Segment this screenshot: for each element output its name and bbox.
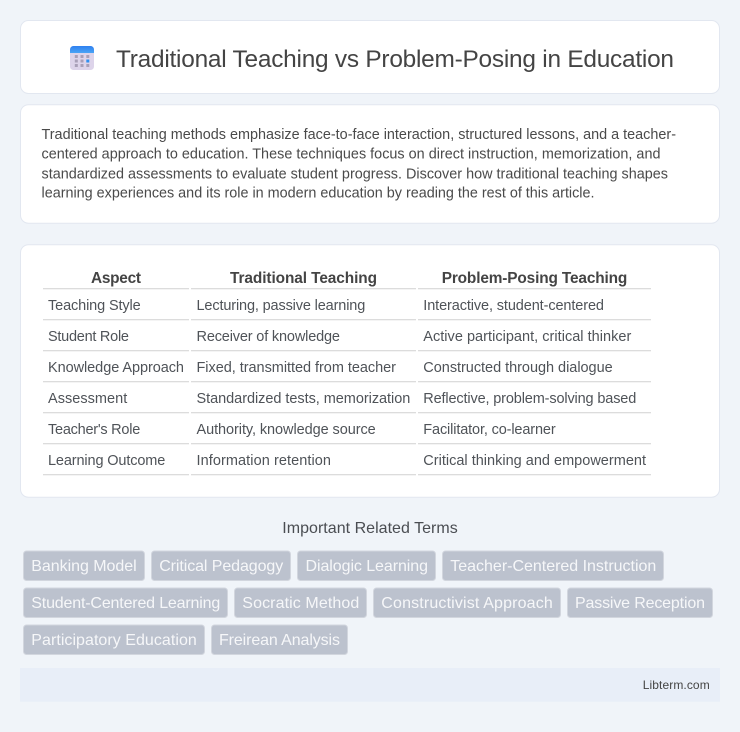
- tag: Student-Centered Learning: [24, 588, 228, 618]
- table header row: Traditional Teaching: [230, 270, 377, 287]
- panel: comparison table: [20, 245, 720, 497]
- table row: Student Role: Student Role: [48, 329, 129, 345]
- tag: Dialogic Learning: Dialogic Learning: [306, 558, 428, 575]
- table header row: Aspect: [91, 270, 141, 287]
- table row: Knowledge Approach: Fixed, transmitted from teacher: [196, 360, 396, 376]
- table row: Teaching Style: [43, 298, 651, 320]
- tag: Critical Pedagogy: [152, 551, 290, 580]
- table row: Assessment: Standardized tests, memorization: [196, 391, 410, 407]
- tag: Student-Centered Learning: Student-Centered Learning: [31, 595, 220, 612]
- tag: Banking Model: [24, 551, 144, 580]
- table row: Teacher's Role: [43, 422, 651, 444]
- intro paragraph: learning experiences and its role in modern education by reading the rest of this article.: [42, 185, 594, 201]
- table row: Teaching Style: Interactive, student-centered: [423, 298, 604, 314]
- tag: Teacher-Centered Instruction: Teacher-Centered Instruction: [450, 558, 656, 575]
- intro paragraph: Traditional teaching methods emphasize face-to-face interaction, structured lessons, and a teacher-: [42, 127, 676, 143]
- intro paragraph: standardized assessments to evaluate student progress. Discover how traditional teaching shapes: [42, 166, 668, 182]
- heading: related terms: Important Related Terms: [282, 520, 458, 537]
- table row: Student Role: Receiver of knowledge: [196, 329, 340, 345]
- table header row: Problem-Posing Teaching: [442, 270, 627, 287]
- table row: Learning Outcome: [43, 453, 651, 475]
- panel: header: [20, 20, 720, 94]
- tag: Participatory Education: [24, 625, 204, 654]
- intro paragraph: [42, 127, 676, 201]
- tag: Critical Pedagogy: Critical Pedagogy: [159, 558, 283, 575]
- tag: Passive Reception: [568, 588, 712, 618]
- table row: Knowledge Approach: Knowledge Approach: [48, 360, 184, 376]
- table row: Teacher's Role: Facilitator, co-learner: [423, 422, 556, 438]
- related term tags: [24, 551, 712, 654]
- tag: Freirean Analysis: Freirean Analysis: [219, 632, 340, 649]
- tag: Freirean Analysis: [212, 625, 348, 654]
- table row: Teaching Style: Lecturing, passive learning: [196, 298, 365, 314]
- table header row: [43, 270, 651, 289]
- table row: Knowledge Approach: [43, 360, 651, 382]
- table row: Teacher's Role: Teacher's Role: [48, 422, 140, 438]
- tag: Participatory Education: Participatory Education: [31, 632, 197, 649]
- tag: Constructivist Approach: [374, 588, 560, 618]
- table row: Assessment: Reflective, problem-solving based: [423, 391, 636, 407]
- table row: Knowledge Approach: Constructed through dialogue: [423, 360, 613, 376]
- table row: Teacher's Role: Authority, knowledge source: [196, 422, 376, 438]
- table row: Learning Outcome: Learning Outcome: [48, 453, 165, 469]
- title: Traditional Teaching vs Problem-Posing in Education: [116, 46, 674, 73]
- table row: Student Role: Active participant, critical thinker: [423, 329, 631, 345]
- tag: Socratic Method: [234, 588, 366, 618]
- table row: Learning Outcome: Critical thinking and empowerment: [423, 453, 646, 469]
- tag: Dialogic Learning: [298, 551, 436, 580]
- panel: intro text: [20, 105, 720, 223]
- intro paragraph: centered approach to education. These techniques focus on direct instruction, memorization, and: [42, 146, 660, 162]
- footer bar: [20, 668, 720, 702]
- icon: calendar: [70, 46, 94, 70]
- table row: Student Role: [43, 329, 651, 351]
- table row: Learning Outcome: Information retention: [196, 453, 331, 469]
- footer credit: Libterm.com: [643, 678, 710, 692]
- tag: Constructivist Approach: Constructivist Approach: [381, 595, 553, 612]
- table row: Assessment: [43, 391, 651, 413]
- tag: Banking Model: Banking Model: [31, 558, 137, 575]
- table row: Teaching Style: Teaching Style: [48, 298, 141, 314]
- tag: Socratic Method: Socratic Method: [242, 595, 359, 612]
- table row: Assessment: Assessment: [48, 391, 127, 407]
- tag: Passive Reception: Passive Reception: [575, 595, 705, 612]
- tag: Teacher-Centered Instruction: [442, 551, 664, 580]
